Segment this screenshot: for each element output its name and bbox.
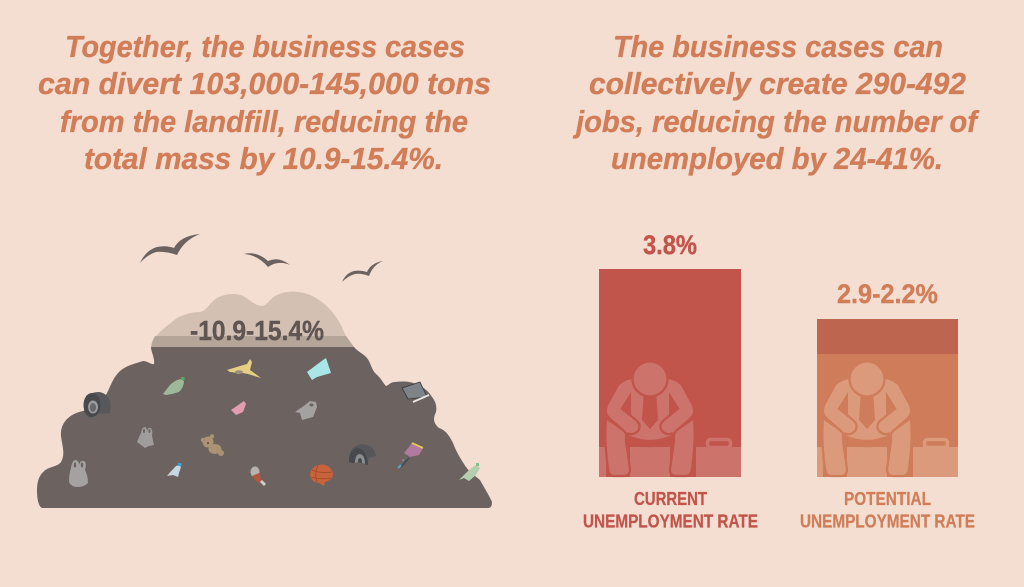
- reduced mass portion: [151, 292, 354, 347]
- heading: landfill diversion: [38, 29, 491, 176]
- trash: left tire: [84, 392, 110, 418]
- bar label: [583, 488, 758, 532]
- landfill mound: [37, 292, 492, 508]
- bar: current unemployment: [583, 230, 758, 532]
- heading: job creation: collectively create 290-492: [589, 66, 966, 101]
- trash: right tire: [349, 444, 376, 465]
- reduction label: -10.9-15.4%: [190, 315, 324, 346]
- trash: laptop: [402, 382, 429, 402]
- trash: basketball: [310, 464, 333, 486]
- bar label: UNEMPLOYMENT RATE: [583, 510, 758, 532]
- trash: brush: [398, 443, 423, 468]
- trash: left bag: [69, 460, 88, 487]
- trash: red bottle: [250, 466, 265, 485]
- heading: job creation: [572, 29, 980, 176]
- icon: unemployed person with briefcase: [817, 362, 958, 477]
- trash: banana peel: [227, 359, 261, 378]
- bar label: UNEMPLOYMENT RATE: [800, 510, 975, 532]
- bar: potential unemployment: [800, 279, 975, 532]
- bar rectangle: [599, 269, 741, 477]
- icon: birds: [140, 234, 383, 282]
- reduced unemployment band: [817, 319, 958, 354]
- trash: pink item: [231, 401, 246, 415]
- bar rectangle: [817, 319, 958, 477]
- band between current and reduced level: [151, 336, 354, 347]
- trash: middle bag: [137, 427, 154, 448]
- heading: job creation: The business cases can: [613, 29, 943, 64]
- heading: job creation: jobs, reducing the number of: [572, 104, 980, 139]
- trash: cyan cup: [307, 358, 331, 380]
- bar label: [800, 488, 975, 532]
- heading: landfill diversion: from the landfill, reducing the: [60, 104, 468, 139]
- rate value: 3.8%: [643, 230, 697, 260]
- trash: grey bag right: [295, 401, 317, 420]
- heading: landfill diversion: can divert 103,000-145,000 tons: [38, 66, 491, 101]
- bar label: POTENTIAL: [844, 488, 931, 509]
- trash: pale green bottle: [459, 463, 480, 481]
- trash: blue bottle: [167, 463, 182, 477]
- heading: job creation: unemployed by 24-41%.: [611, 141, 943, 176]
- trash: green bottle: [163, 377, 184, 395]
- icon: unemployed person with briefcase: [599, 362, 741, 477]
- remaining waste mass: [37, 347, 492, 508]
- rate value: 2.9-2.2%: [837, 279, 938, 309]
- bar label: CURRENT: [634, 488, 708, 509]
- heading: landfill diversion: total mass by 10.9-15.4%.: [84, 141, 443, 176]
- heading: landfill diversion: Together, the business cases: [65, 29, 465, 64]
- trash: teddy bear: [201, 434, 224, 456]
